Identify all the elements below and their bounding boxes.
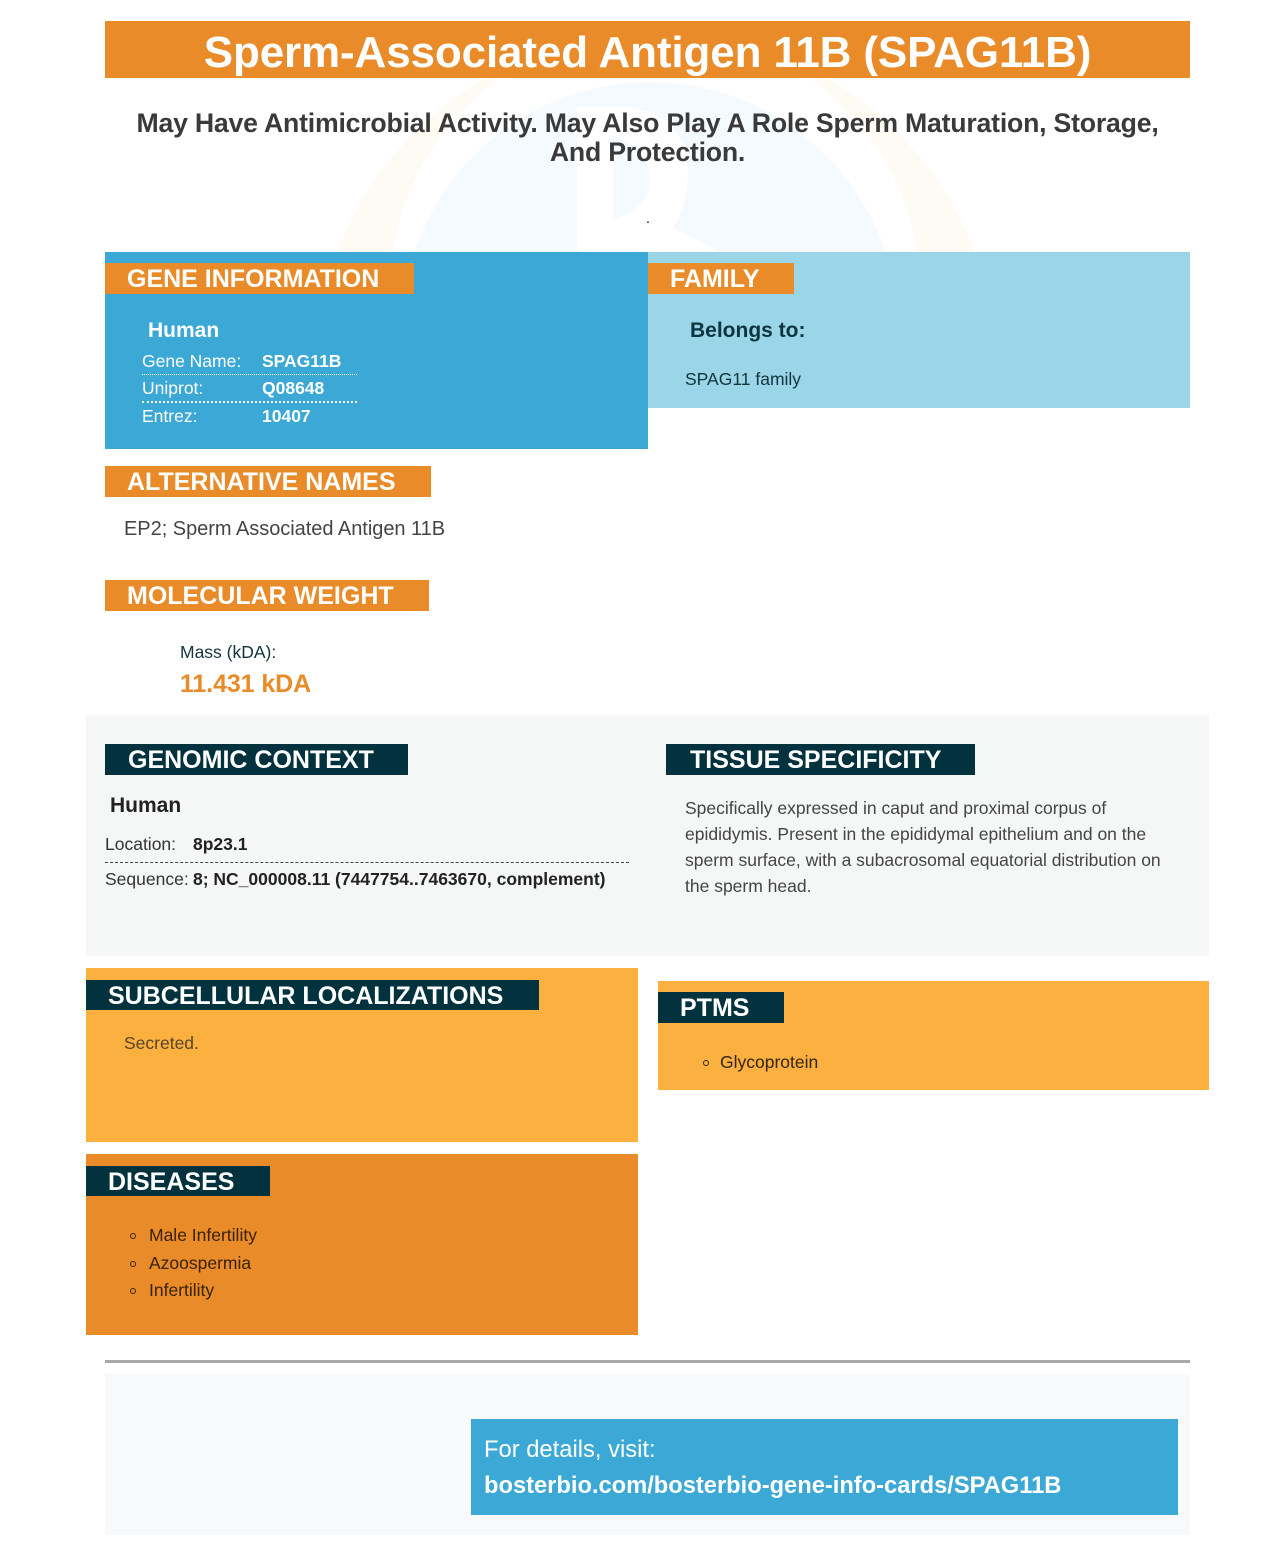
heading: molecular weight: MOLECULAR WEIGHT [127,582,394,610]
row: uniprot: Uniprot: [142,378,203,398]
species label: Human [148,319,219,342]
alternative names text: EP2; Sperm Associated Antigen 11B [124,518,445,540]
callout: details link [471,1419,1178,1515]
panel: gene information [105,252,648,449]
row: gene name: Gene Name: [142,351,241,371]
heading: gene information: GENE INFORMATION [127,265,379,293]
panel: diseases [86,1154,638,1335]
heading: family: FAMILY [670,265,759,293]
panel: ptms [658,981,1209,1090]
title banner: Sperm-Associated Antigen 11B (SPAG11B) [204,28,1091,77]
sequence value: 8; NC_000008.11 (7447754..7463670, complement) [193,869,606,889]
dot: . [646,210,650,226]
heading: diseases [86,1166,270,1196]
subtitle: May Have Antimicrobial Activity. May Also Play A Role Sperm Maturation, Storage, [136,108,1159,138]
bullet [130,1288,136,1294]
panel: genomic band [86,715,1209,956]
subtitle: And Protection. [550,137,745,167]
heading: alternative names: ALTERNATIVE NAMES [127,468,396,496]
tissue specificity text: Specifically expressed in caput and proximal corpus of [685,798,1106,818]
value: gene name: SPAG11B [262,351,341,371]
species label: Human [110,794,181,817]
belongs to label: Belongs to: [690,319,806,342]
sequence label: Sequence: [105,869,189,889]
tissue specificity text: the sperm head. [685,876,811,896]
row: entrez: Entrez: [142,406,197,426]
item: Infertility [149,1280,214,1300]
subtitle [136,108,1159,167]
tissue specificity text: epididymis. Present in the epididymal epithelium and on the [685,824,1146,844]
heading: genomic context: GENOMIC CONTEXT [128,746,374,774]
mass label: Mass (kDA): [180,642,276,662]
item: Male Infertility [149,1225,257,1245]
location label: Location: [105,834,176,854]
heading: diseases: DISEASES [108,1168,234,1196]
bullet [703,1060,709,1066]
panel: family [648,252,1190,408]
list: diseases [130,1225,257,1300]
family value: SPAG11 family [685,369,801,389]
panel: subcellular localizations [86,968,638,1142]
callout url: bosterbio.com/bosterbio-gene-info-cards/SPAG11B [484,1473,1061,1499]
location value: 8p23.1 [193,834,247,854]
heading: tissue specificity: TISSUE SPECIFICITY [690,746,941,774]
mass value: 11.431 kDA [180,670,311,698]
list: ptms [703,1052,818,1072]
watermark logo [338,78,974,252]
heading: ptms: PTMS [680,994,749,1022]
localization text: Secreted. [124,1033,199,1053]
value: entrez: 10407 [262,406,311,426]
bullet [130,1233,136,1239]
heading: ptms [658,992,784,1023]
heading: subcellular localizations: SUBCELLULAR LOCALIZATIONS [108,982,503,1010]
tissue specificity text [685,798,1161,896]
item: Glycoprotein [720,1052,818,1072]
tissue specificity text: sperm surface, with a subacrosomal equatorial distribution on [685,850,1161,870]
heading: family [648,263,794,294]
value: uniprot: Q08648 [262,378,324,398]
item: Azoospermia [149,1253,251,1273]
callout label: For details, visit: [484,1436,656,1463]
panel: footer [105,1374,1190,1535]
bullet [130,1261,136,1267]
